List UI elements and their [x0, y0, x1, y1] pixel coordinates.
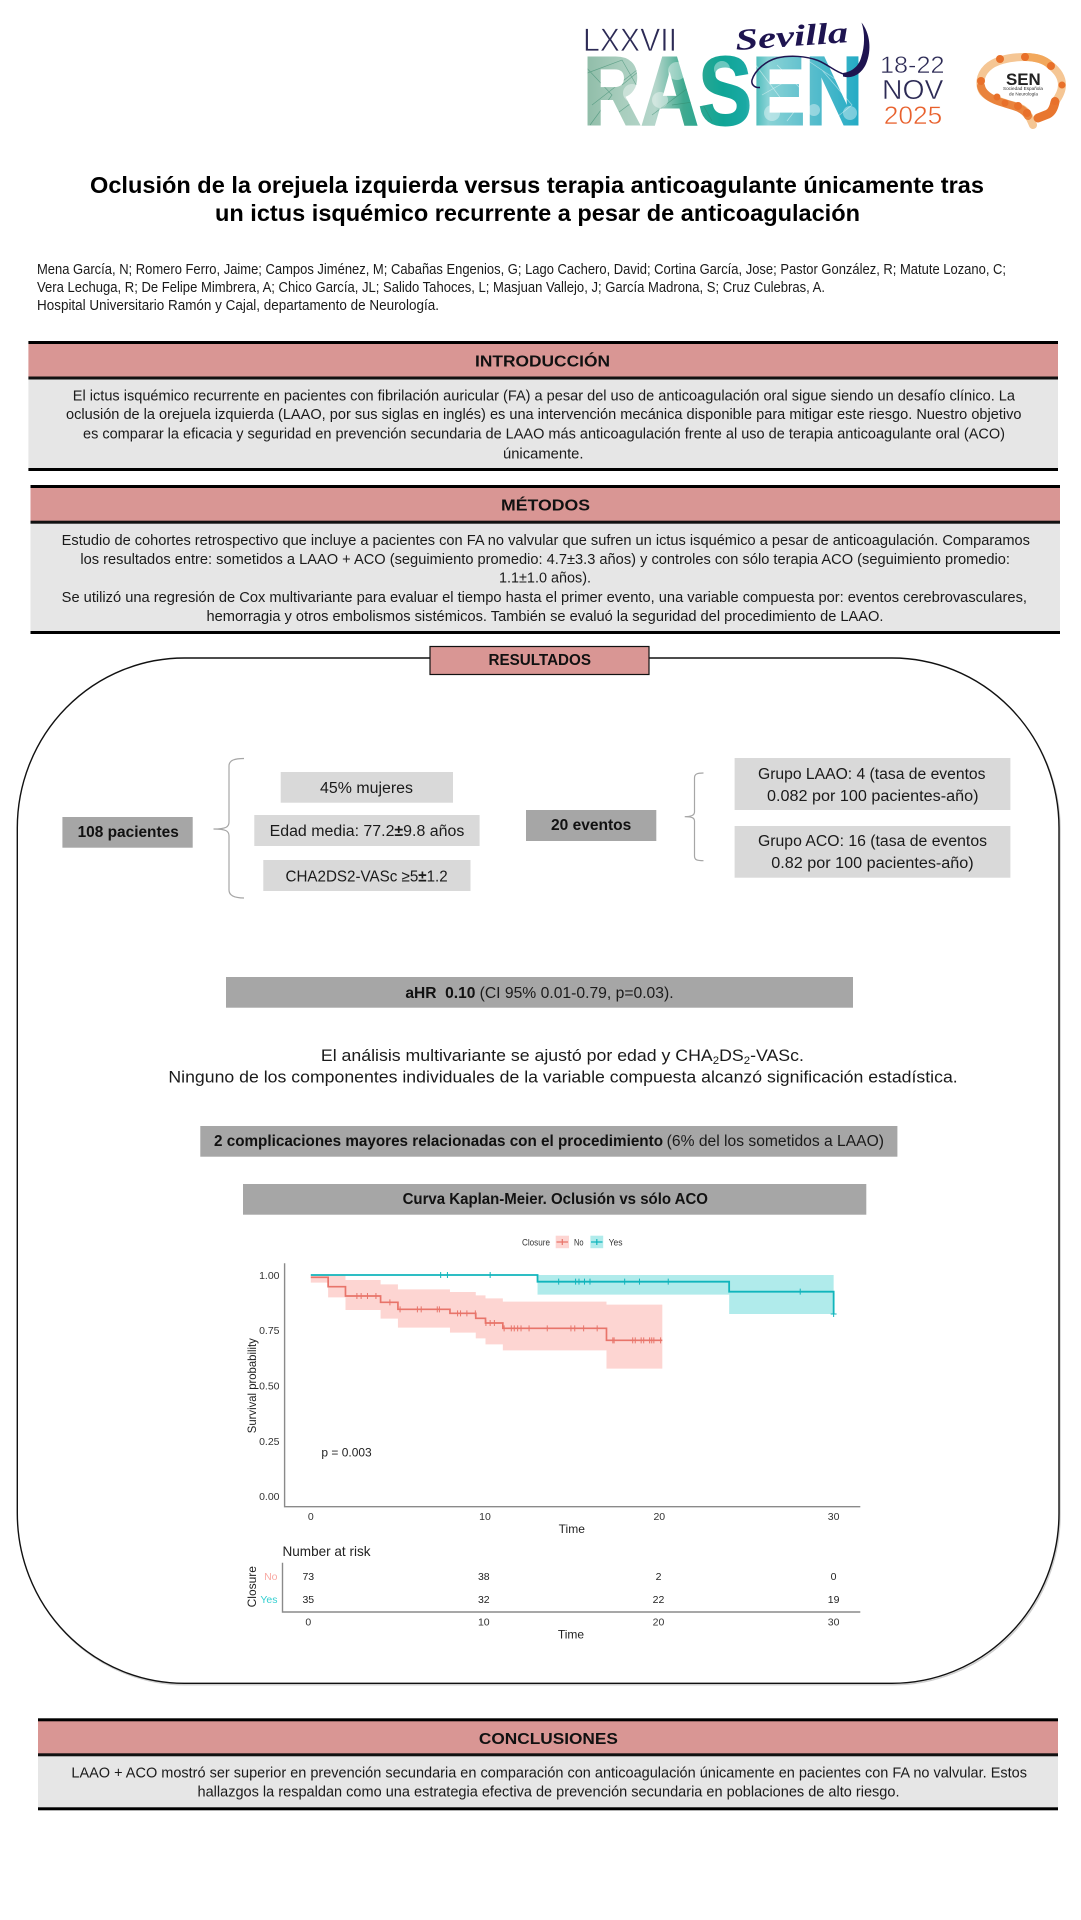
x axis tick labels: 20 — [653, 1511, 665, 1523]
text: introducción: oclusión de la orejuela izquierda (LAAO, por sus siglas en inglés) es una intervención mecánica disponible para mitigar este riesgo. Nuestro objetivo — [66, 407, 1022, 423]
panel: introducción — [28, 341, 1058, 471]
y axis tick labels: 0.75 — [259, 1325, 280, 1337]
authors and affiliation: Vera Lechuga, R; De Felipe Mimbrera, A; Chico García, JL; Salido Tahoces, L; Masjuan Vallejo, J; García Madrona, S; Cruz Culebras, A. — [37, 280, 825, 296]
table: number at risk: 38 — [478, 1571, 490, 1583]
text: métodos — [62, 533, 1030, 625]
text: introducción — [66, 388, 1022, 462]
logo: LXXVII RASEN Sevilla 2025: 2025 — [884, 102, 942, 130]
title: Oclusión de la orejuela izquierda versus terapia anticoagulante únicamente tras — [90, 172, 984, 198]
table: number at risk: 73 — [302, 1571, 314, 1583]
box: 20 eventos: 20 eventos — [551, 817, 631, 834]
text: introducción: es comparar la eficacia y seguridad en prevención secundaria de LAAO más anticoagulación frente al uso de terapia anticoagulante oral (ACO) — [83, 426, 1005, 442]
box: aHR: (CI 95% 0.01-0.79, p=0.03). — [480, 985, 674, 1002]
box: 45% mujeres — [281, 772, 453, 803]
title — [90, 172, 984, 226]
box: grupo LAAO: 0.082 por 100 pacientes-año) — [767, 788, 978, 805]
authors and affiliation — [37, 262, 1006, 314]
text: introducción: El ictus isquémico recurrente en pacientes con fibrilación auricular (FA) a pesar del uso de anticoagulación oral sigue siendo un desafío clínico. La — [73, 388, 1016, 404]
table: number at risk: 35 — [302, 1594, 314, 1606]
table: number at risk: Time — [558, 1628, 584, 1642]
text: análisis multivariante: Ninguno de los componentes individuales de la variable compuesta alcanzó significación estadística. — [168, 1068, 958, 1086]
table: number at risk: 22 — [653, 1594, 664, 1606]
text: análisis multivariante: 2 — [713, 1055, 719, 1067]
table: number at risk: 30 — [828, 1616, 840, 1628]
box: 20 eventos — [526, 810, 656, 841]
table: number at risk: 20 — [653, 1616, 664, 1628]
box: edad media — [254, 815, 480, 846]
table: number at risk: 2 — [656, 1571, 662, 1583]
panel: conclusiones — [38, 1718, 1058, 1810]
table: number at risk: No — [264, 1571, 278, 1583]
table: number at risk: Yes — [260, 1594, 278, 1606]
heading: resultados: RESULTADOS — [488, 652, 591, 669]
text: métodos: los resultados entre: sometidos a LAAO + ACO (seguimiento promedio: 4.7±3.3 años) y controles con sólo terapia ACO (seguimiento promedio: — [80, 552, 1010, 568]
logo: LXXVII RASEN Sevilla 2025: RASEN — [583, 36, 863, 146]
box: grupo LAAO — [735, 758, 1010, 810]
box: aHR — [226, 977, 853, 1008]
box: grupo LAAO: Grupo LAAO: 4 (tasa de eventos — [758, 766, 986, 783]
box: CHA2DS2-VASc: CHA2DS2-VASc ≥5±1.2 — [286, 868, 448, 886]
axis title: time: Time — [559, 1522, 585, 1536]
box: grupo ACO — [735, 826, 1010, 878]
table: number at risk: 0 — [305, 1616, 311, 1628]
box: complicaciones: 2 complicaciones mayores relacionadas con el procedimiento — [214, 1133, 663, 1150]
text: métodos: 1.1±1.0 años). — [499, 570, 591, 586]
heading: métodos: MÉTODOS — [501, 498, 590, 514]
text: conclusiones: hallazgos la respaldan como una estrategia efectiva de prevención secundaria en poblaciones de alto riesgo. — [198, 1784, 900, 1800]
text: análisis multivariante: El análisis multivariante se ajustó por edad y CHA — [321, 1046, 697, 1065]
legend — [522, 1236, 623, 1248]
table: number at risk: 10 — [478, 1616, 490, 1628]
box: 108 pacientes: 108 pacientes — [78, 824, 179, 841]
bracket: pacientes — [214, 758, 244, 898]
box: 45% mujeres: 45% mujeres — [320, 780, 413, 797]
box: complicaciones — [200, 1126, 897, 1157]
box: CHA2DS2-VASc — [263, 860, 470, 891]
table: number at risk: 32 — [478, 1594, 490, 1606]
table: number at risk: 0 — [831, 1571, 837, 1583]
text: métodos: Se utilizó una regresión de Cox multivariante para evaluar el tiempo hasta el primer evento, una variable compuesta por: eventos cerebrovasculares, — [62, 590, 1027, 606]
legend: No — [574, 1238, 584, 1248]
box: 108 pacientes — [62, 817, 193, 848]
p value: p = 0.003 — [321, 1446, 372, 1460]
title: un ictus isquémico recurrente a pesar de anticoagulación — [215, 200, 860, 226]
text: análisis multivariante: DS — [719, 1046, 744, 1065]
y axis tick labels — [259, 1270, 280, 1503]
box: curva Kaplan-Meier — [243, 1184, 866, 1215]
y axis tick labels: 0.25 — [259, 1436, 280, 1448]
text: métodos: Estudio de cohortes retrospectivo que incluye a pacientes con FA no valvular que sufren un ictus isquémico a pesar de anticoagulación. Comparamos — [62, 533, 1030, 549]
table: number at risk: Closure — [245, 1566, 259, 1607]
axes — [285, 1263, 860, 1507]
y axis tick labels: 0.50 — [259, 1380, 280, 1392]
logo: LXXVII RASEN Sevilla 2025: 18-22 — [880, 52, 944, 79]
logo: LXXVII RASEN Sevilla 2025: NOV — [882, 74, 944, 105]
logo: LXXVII RASEN Sevilla 2025: Sevilla — [734, 16, 849, 57]
box: complicaciones: (6% del los sometidos a LAAO) — [667, 1133, 884, 1150]
box: grupo ACO: Grupo ACO: 16 (tasa de eventos — [758, 833, 987, 850]
logo: SEN brain: de Neurología — [1009, 92, 1038, 98]
box: edad media: Edad media: 77.2±9.8 años — [270, 823, 465, 840]
text: análisis multivariante: 2 — [744, 1055, 750, 1067]
panel: métodos — [30, 485, 1060, 634]
logo: SEN brain: Sociedad Española — [1003, 86, 1043, 92]
box: curva Kaplan-Meier: Curva Kaplan-Meier. Oclusión vs sólo ACO — [403, 1191, 708, 1208]
text: métodos: hemorragia y otros embolismos sistémicos. También se evaluó la seguridad del procedimiento de LAAO. — [206, 609, 884, 625]
x axis tick labels: 10 — [479, 1511, 491, 1523]
panel: resultados — [17, 646, 1060, 1685]
logo: SEN brain: SEN — [1006, 70, 1041, 89]
bracket: eventos — [685, 773, 704, 861]
logo: LXXVII RASEN Sevilla 2025: LXXVII — [583, 22, 677, 58]
text: conclusiones — [71, 1766, 1027, 1800]
heading: conclusiones: CONCLUSIONES — [479, 1731, 618, 1748]
table: number at risk: 19 — [828, 1594, 840, 1606]
y axis tick labels: 0.00 — [259, 1491, 280, 1503]
text: análisis multivariante: -VASc. — [750, 1046, 804, 1065]
table: number at risk: Number at risk — [282, 1543, 371, 1559]
x axis tick labels: 0 — [308, 1511, 314, 1523]
axis title: survival probability: Survival probability — [245, 1338, 259, 1433]
logo: SEN brain — [977, 53, 1066, 125]
chart: Kaplan-Meier survival — [245, 1236, 860, 1536]
survival curves — [311, 1272, 837, 1369]
heading: resultados — [430, 646, 649, 674]
y axis tick labels: 1.00 — [259, 1270, 280, 1282]
legend: Yes — [609, 1238, 623, 1248]
box: grupo ACO: 0.82 por 100 pacientes-año) — [771, 855, 974, 872]
text: análisis multivariante — [168, 1046, 958, 1086]
table: number at risk — [245, 1543, 860, 1642]
x axis tick labels: 30 — [828, 1511, 840, 1523]
legend: Closure — [522, 1238, 550, 1248]
heading: introducción: INTRODUCCIÓN — [475, 352, 610, 370]
text: introducción: únicamente. — [503, 446, 584, 462]
text: conclusiones: LAAO + ACO mostró ser superior en prevención secundaria en comparación con anticoagulación únicamente en pacientes con FA no valvular. Estos — [71, 1766, 1027, 1782]
box: aHR: aHR 0.10 — [405, 985, 475, 1002]
authors and affiliation: Hospital Universitario Ramón y Cajal, departamento de Neurología. — [37, 298, 439, 314]
x axis tick labels — [308, 1511, 840, 1523]
